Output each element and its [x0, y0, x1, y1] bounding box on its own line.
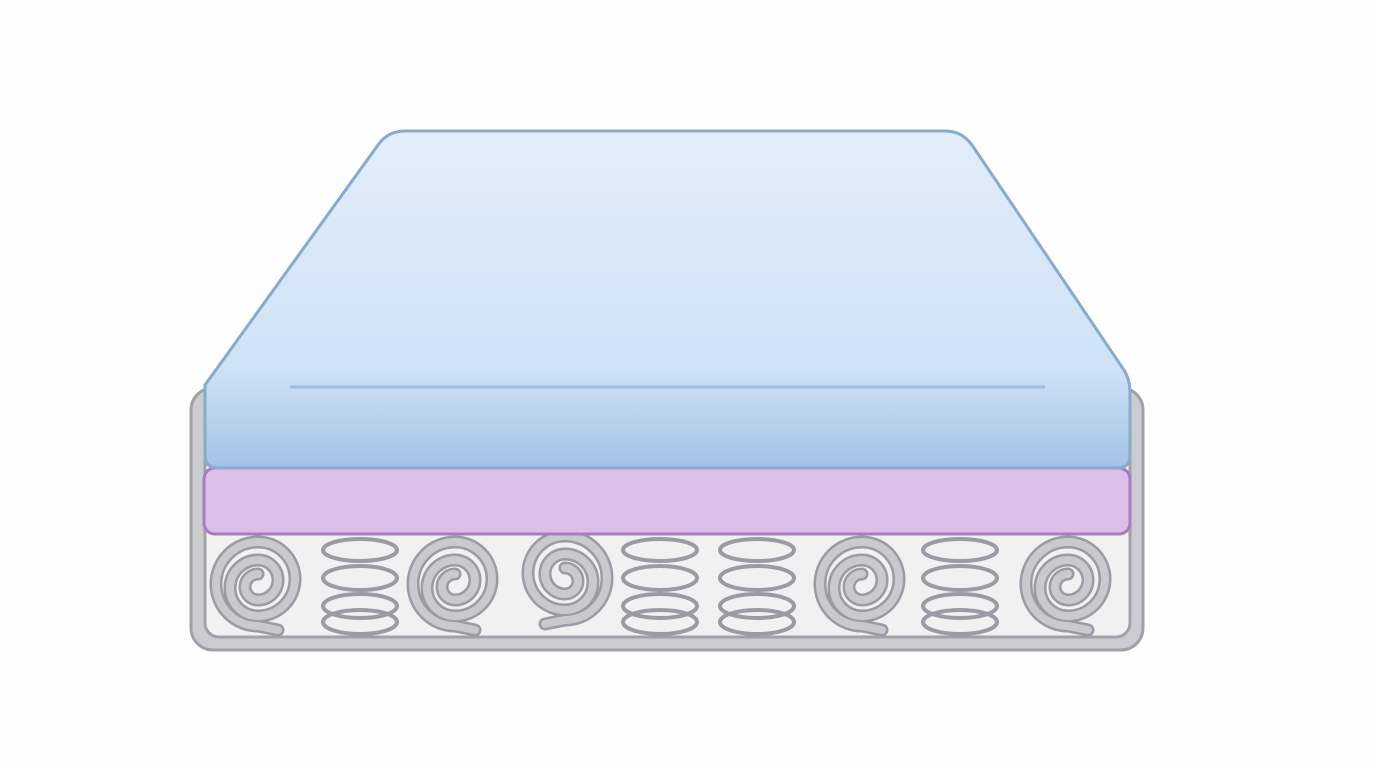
- middle layer: purple: [204, 468, 1130, 534]
- top comfort layer: blue: [205, 131, 1130, 468]
- springs: [216, 536, 1105, 634]
- coil springs: [323, 539, 997, 634]
- base frame: [191, 388, 1143, 650]
- spiral springs: [216, 536, 1105, 630]
